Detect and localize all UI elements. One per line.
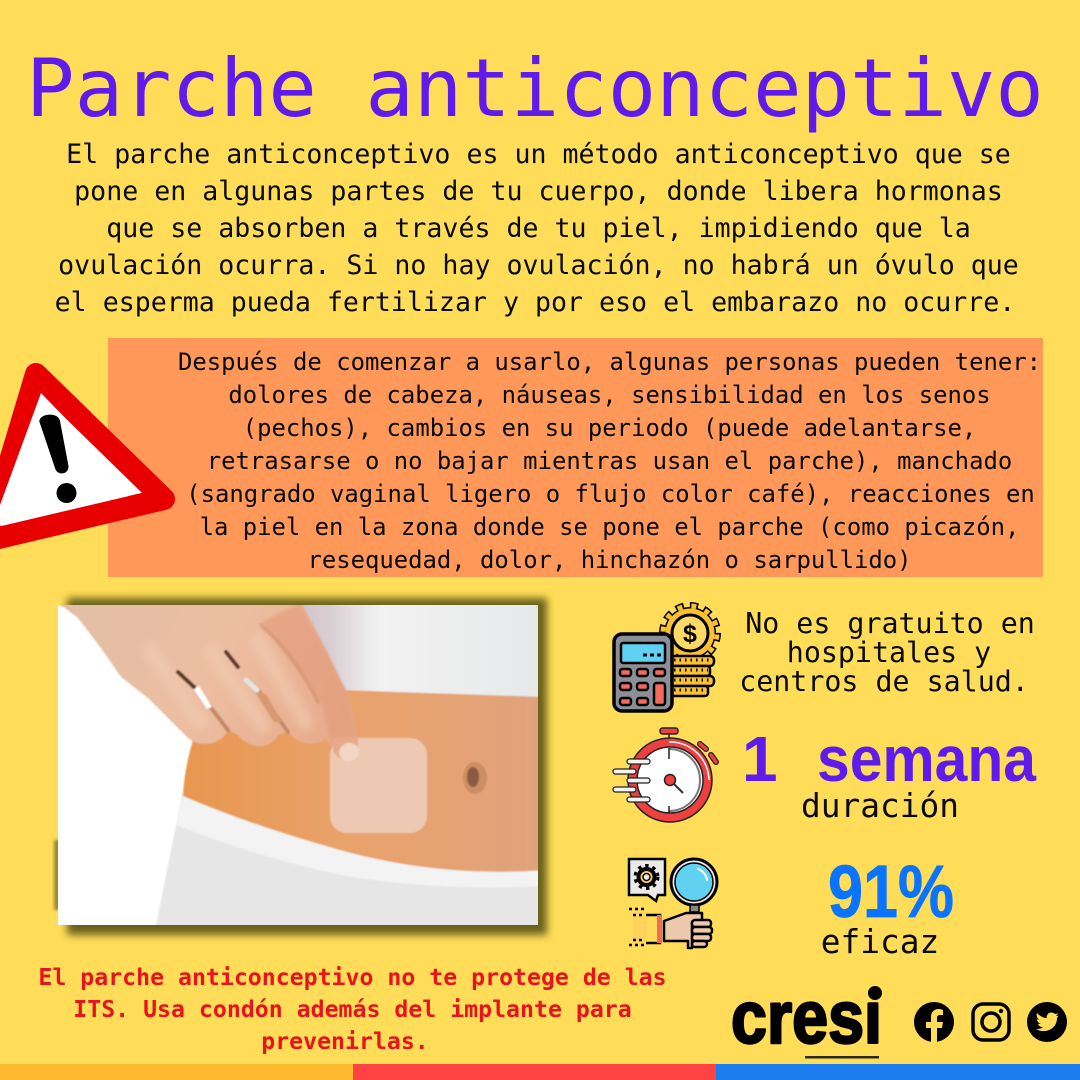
- text: not free: [739, 607, 1035, 698]
- intro text block: El parche anticonceptivo es un método anticonceptivo que se: [66, 139, 1011, 170]
- icon: twitter: [1027, 1002, 1067, 1042]
- icon: calculator and coins: [614, 606, 717, 711]
- abdomen skin: [183, 690, 545, 872]
- intro text block: el esperma pueda fertilizar y por eso el embarazo no ocurre.: [55, 287, 1015, 318]
- stat: efficacy: 91%: [828, 850, 954, 933]
- panel: side effects: (pechos), cambios en su periodo (puede adelantarse,: [243, 414, 976, 442]
- icon: instagram: [973, 1004, 1009, 1040]
- patch: [330, 738, 427, 833]
- shirt: [302, 605, 538, 697]
- gaps between fingers: [255, 692, 282, 722]
- intro text block: que se absorben a través de tu piel, impidiendo que la: [106, 213, 971, 244]
- panel: side effects: Después de comenzar a usarlo, algunas personas pueden tener:: [178, 348, 1041, 376]
- warning note: prevenirlas.: [261, 1028, 429, 1055]
- panel: side effects: retrasarse o no bajar mientras usan el parche), manchado: [207, 447, 1012, 475]
- icon: magnifier and hand: [629, 859, 717, 948]
- title: Parche anticonceptivo: [26, 41, 1044, 135]
- stat: efficacy: [821, 850, 954, 961]
- logo: cresi: cresi: [731, 976, 882, 1059]
- warning note: ITS. Usa condón además del implante para: [73, 996, 632, 1023]
- index finger shade: [263, 605, 354, 738]
- stat: duration: [742, 723, 1036, 825]
- navel: [463, 762, 487, 794]
- panel: side effects: resequedad, dolor, hinchazón o sarpullido): [307, 546, 912, 574]
- fingertip: [333, 736, 358, 760]
- intro text block: ovulación ocurra. Si no hay ovulación, no habrá un óvulo que: [58, 250, 1019, 281]
- footer colour bar: [0, 1064, 1080, 1080]
- finger boundaries: [195, 687, 228, 730]
- icon: stopwatch: [613, 728, 716, 822]
- stat: efficacy: eficaz: [821, 923, 939, 961]
- icon: facebook: [914, 1002, 954, 1042]
- stat: duration: 1: [742, 723, 778, 795]
- photo: patch on abdomen: [50, 598, 547, 935]
- panel: side effects: dolores de cabeza, náuseas, sensibilidad en los senos: [228, 381, 991, 409]
- text: not free: hospitales y: [787, 636, 991, 669]
- intro text block: pone en algunas partes de tu cuerpo, donde libera hormonas: [74, 176, 1003, 207]
- panel: side effects: la piel en la zona donde se pone el parche (como picazón,: [200, 513, 1019, 541]
- intro text block: [55, 139, 1019, 318]
- hand: [58, 605, 357, 747]
- warning note: [38, 964, 667, 1055]
- stat: duration: semana: [817, 723, 1036, 795]
- knuckle highlights: [166, 671, 204, 726]
- text: not free: No es gratuito en: [745, 607, 1035, 640]
- panel: side effects: (sangrado vaginal ligero o flujo color café), reacciones en: [186, 480, 1035, 508]
- stat: duration: duración: [801, 787, 959, 825]
- icon: warning triangle: [0, 374, 164, 541]
- text: not free: centros de salud.: [739, 665, 1029, 698]
- icon: calculator and coins: $: [683, 620, 697, 648]
- trousers: [155, 790, 545, 930]
- warning note: El parche anticonceptivo no te protege de las: [38, 964, 667, 991]
- panel: side effects: [108, 338, 1043, 577]
